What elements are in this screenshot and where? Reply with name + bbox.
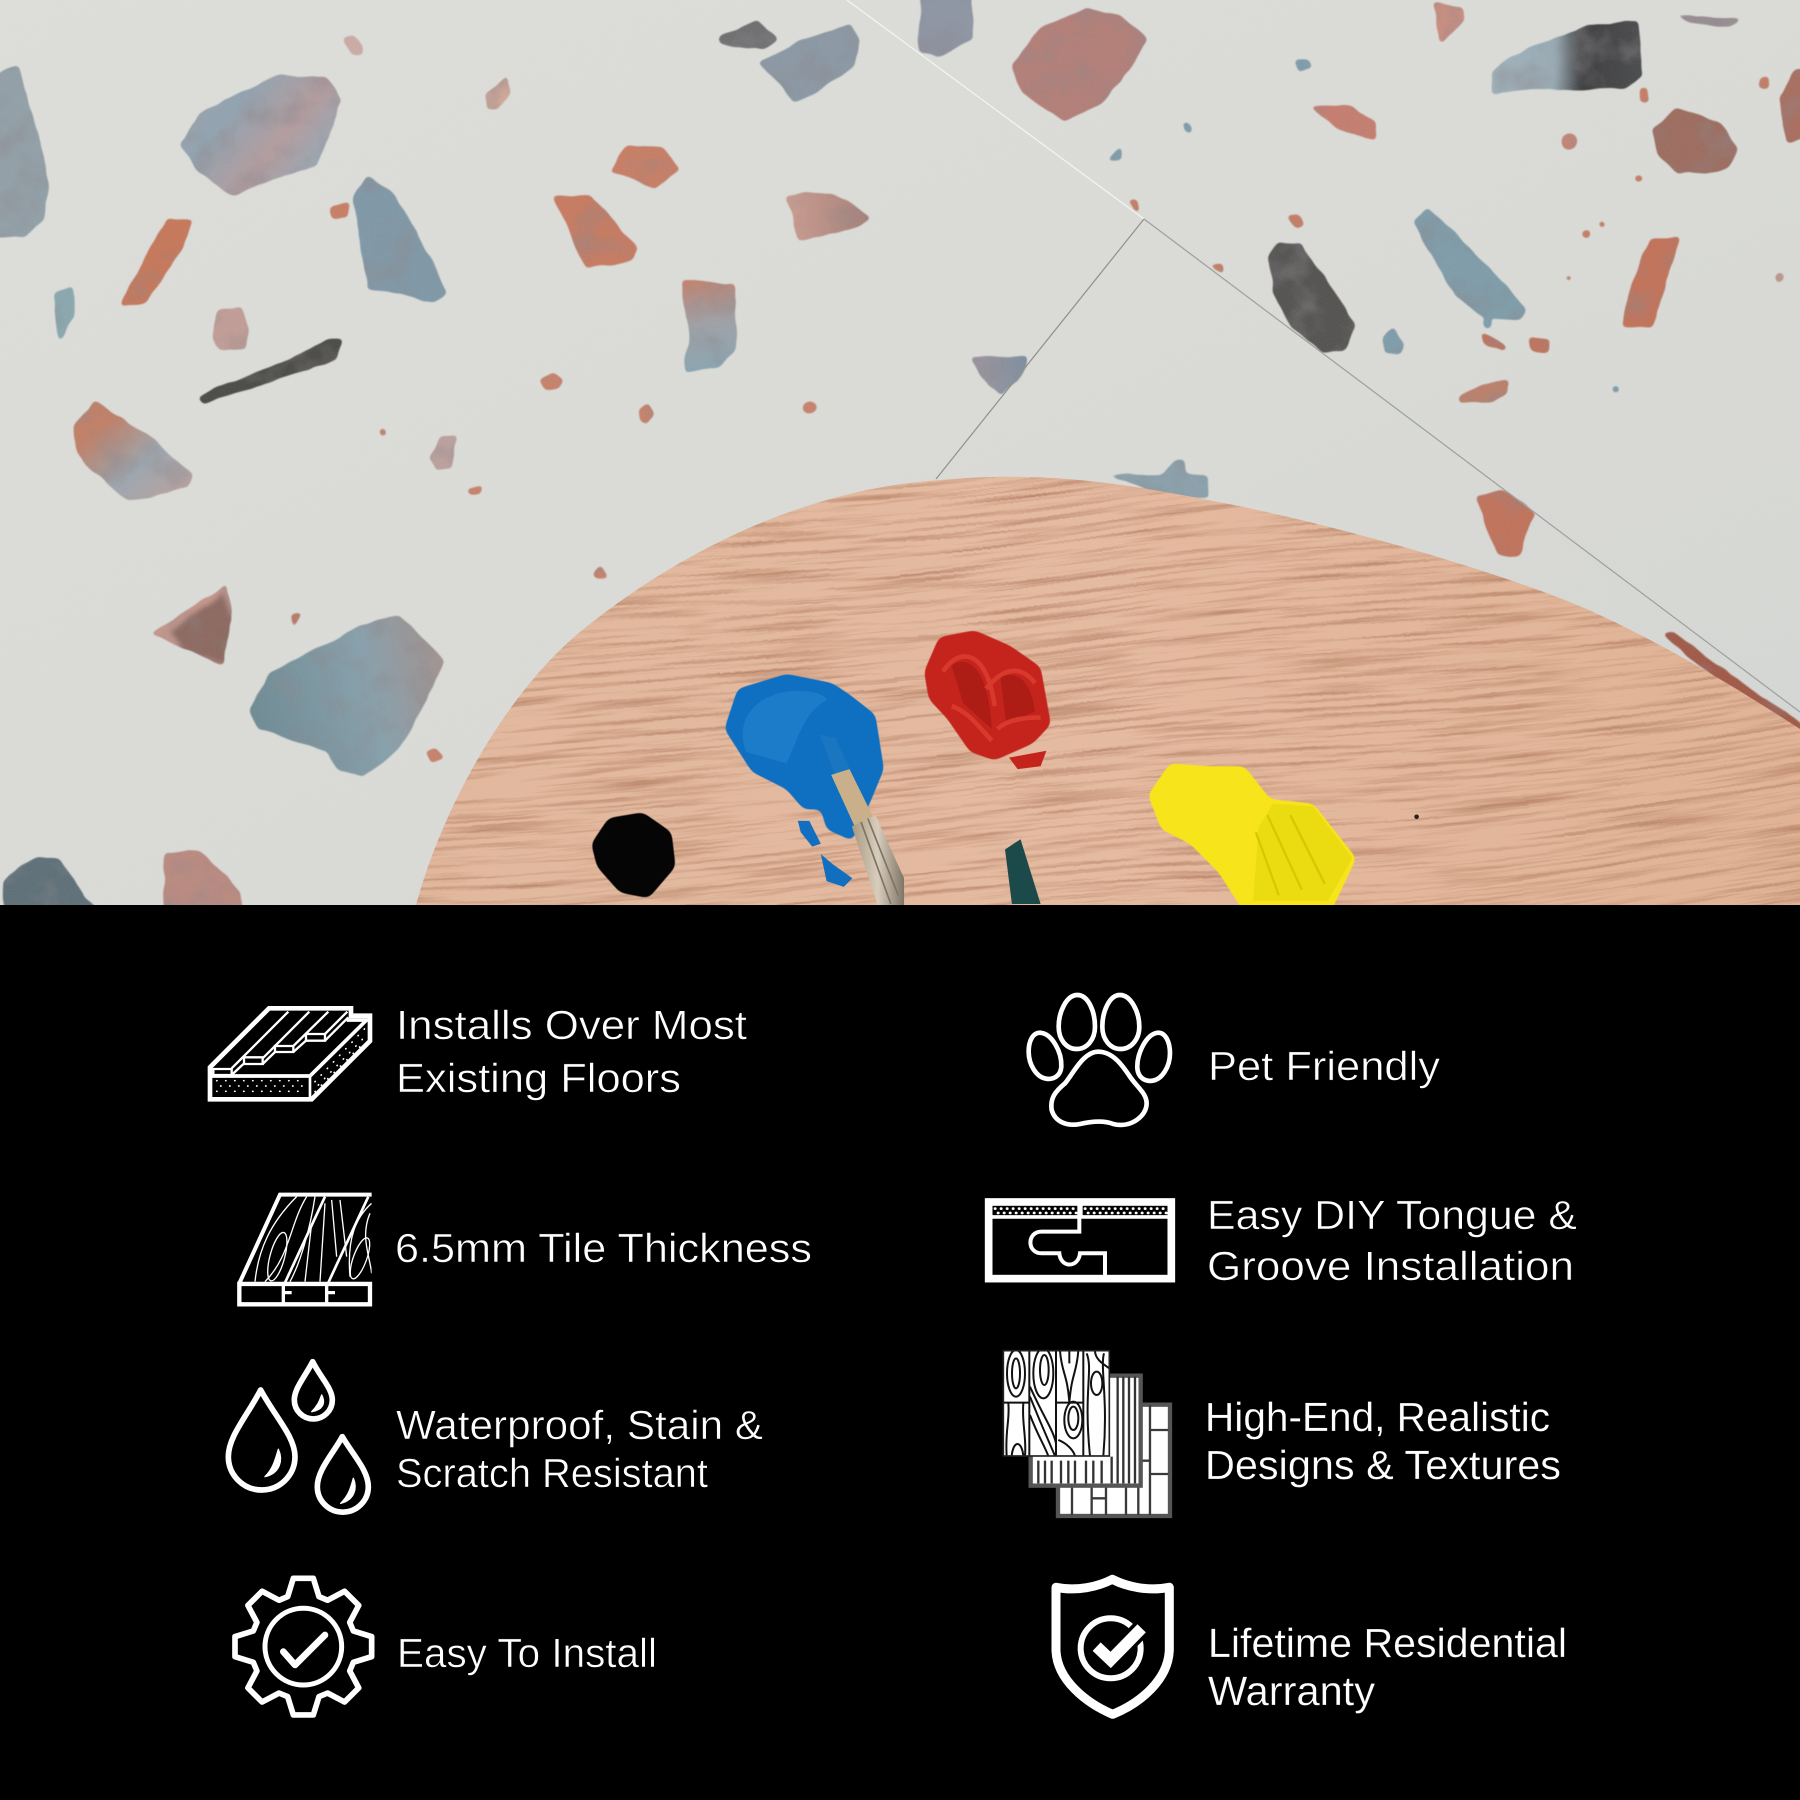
text: tongue and groove: Easy DIY Tongue & <box>1207 1192 1577 1238</box>
text: tongue and groove <box>1207 1192 1577 1289</box>
text: easy to install: Easy To Install <box>397 1630 657 1676</box>
text: waterproof: Scratch Resistant <box>396 1450 709 1496</box>
terrazzo chips, left half <box>0 19 871 913</box>
icon: warranty shield <box>1056 1579 1169 1714</box>
paint: black <box>591 812 676 898</box>
floor speckle <box>0 0 1800 905</box>
icon: paw print <box>1029 995 1170 1125</box>
icon: tongue and groove <box>989 1200 1171 1279</box>
text: installs over most existing floors <box>396 1002 748 1101</box>
terrazzo chips, right half <box>920 0 1800 746</box>
brush: green tip <box>1005 839 1041 904</box>
paint: yellow <box>1148 763 1419 913</box>
text: realistic designs: High-End, Realistic <box>1205 1394 1550 1440</box>
icon: gear with check <box>235 1578 372 1715</box>
paint: red <box>924 630 1051 769</box>
tile seams <box>847 0 1800 712</box>
text: waterproof <box>396 1402 763 1496</box>
text: lifetime warranty <box>1208 1620 1567 1714</box>
text: installs over most existing floors: Existing Floors <box>396 1055 681 1101</box>
text: realistic designs: Designs & Textures <box>1205 1442 1561 1488</box>
text: waterproof: Waterproof, Stain & <box>396 1402 763 1448</box>
icon: wood plank thickness <box>239 1195 377 1304</box>
icon: water drops <box>228 1362 368 1512</box>
icon: floor layers <box>210 1008 370 1099</box>
text: tongue and groove: Groove Installation <box>1207 1243 1574 1289</box>
text: tile thickness: 6.5mm Tile Thickness <box>395 1225 812 1271</box>
brush: blue paint brush <box>820 735 904 907</box>
icon: design texture swatches <box>1003 1348 1170 1516</box>
text: lifetime warranty: Lifetime Residential <box>1208 1620 1567 1666</box>
text: lifetime warranty: Warranty <box>1208 1668 1376 1714</box>
panel: terrazzo floor photo with palette <box>0 0 1800 905</box>
text: installs over most existing floors: Installs Over Most <box>396 1002 748 1048</box>
floor base <box>0 0 1800 905</box>
text: pet friendly: Pet Friendly <box>1208 1043 1441 1089</box>
wood palette <box>416 476 1800 905</box>
text: realistic designs <box>1205 1394 1561 1488</box>
paint: blue <box>724 674 884 887</box>
